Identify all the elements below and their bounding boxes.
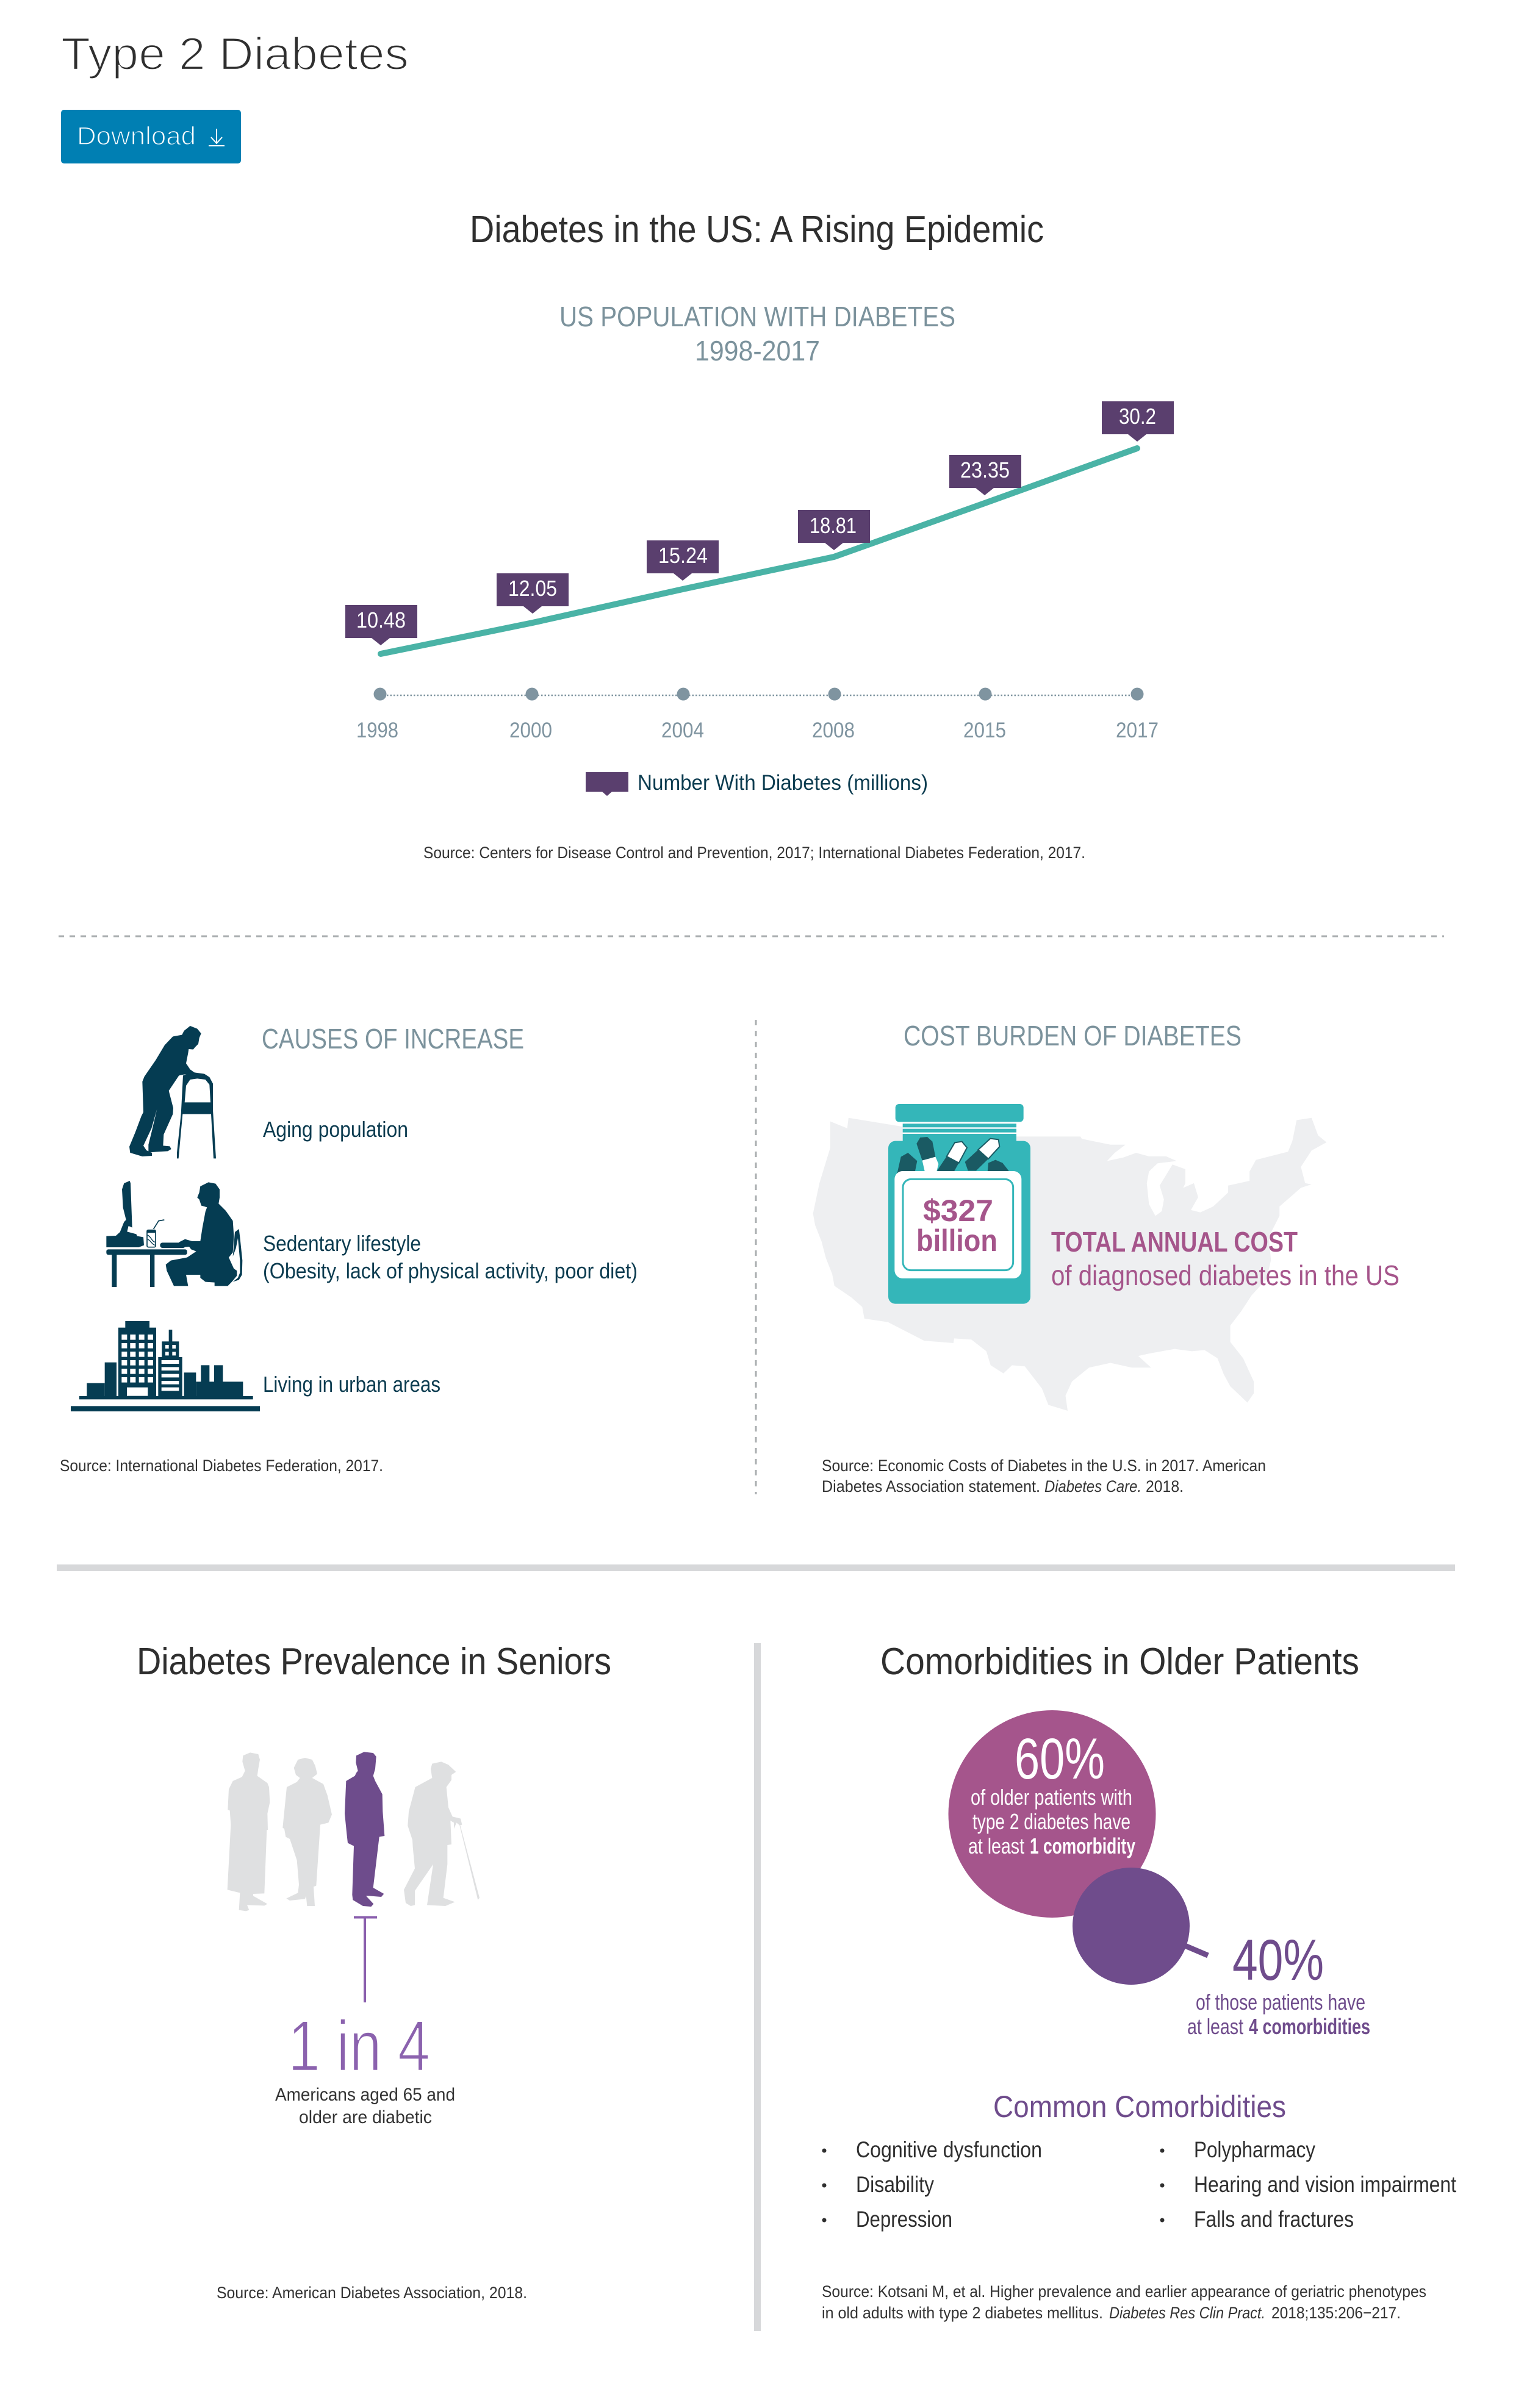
line chart: 23.35 xyxy=(960,457,1010,482)
year labels: 2004 xyxy=(661,718,704,742)
source: cost: Source: Economic Costs of Diabetes in the U.S. in 2017. American xyxy=(822,1457,1266,1475)
list: comorbidities xyxy=(822,2137,1457,2232)
list: comorbidities: Hearing and vision impairment xyxy=(1194,2172,1457,2197)
circle: 60 percent: type 2 diabetes have xyxy=(972,1809,1130,1834)
source: cost: 2018. xyxy=(1146,1477,1184,1496)
stat: 40 percent: at least xyxy=(1187,2014,1243,2039)
chart title xyxy=(559,301,955,367)
jar label text: billion xyxy=(916,1224,997,1258)
source: chart: Source: Centers for Disease Control and Prevention, 2017; International Diabetes Federation, 2017. xyxy=(423,844,1085,862)
circle: 60 percent: 1 comorbidity xyxy=(1030,1833,1135,1858)
heading: common comorbidities: Common Comorbidities xyxy=(993,2090,1286,2124)
circle: 40 percent xyxy=(1073,1868,1208,1985)
list: comorbidities: Cognitive dysfunction xyxy=(856,2137,1042,2162)
panel: comorbidities xyxy=(822,1641,1457,2322)
stat: 40 percent: 4 comorbidities xyxy=(1249,2014,1370,2039)
icon: four senior silhouettes xyxy=(228,1752,480,1911)
text: sedentary: Sedentary lifestyle xyxy=(263,1231,421,1256)
line chart xyxy=(345,401,1174,742)
stat: 40 percent: 40% xyxy=(1232,1928,1324,1993)
connector xyxy=(354,1918,377,2002)
stat: 1 in 4: 1 in 4 xyxy=(288,2006,430,2087)
icon: city buildings xyxy=(71,1321,260,1411)
source: comorbidities: Diabetes Res Clin Pract. xyxy=(1109,2304,1265,2322)
icon: person at desk xyxy=(106,1181,242,1287)
year labels: 2008 xyxy=(812,718,855,742)
map of US xyxy=(813,1118,1326,1411)
chart legend: Number With Diabetes (millions) xyxy=(638,771,928,795)
text: aging: Aging population xyxy=(263,1117,408,1142)
heading: causes: CAUSES OF INCREASE xyxy=(262,1023,524,1055)
stat caption xyxy=(275,2085,455,2127)
year labels: 2000 xyxy=(509,718,552,742)
title: Type 2 Diabetes xyxy=(61,28,409,79)
heading: comorbidities: Comorbidities in Older Patients xyxy=(880,1641,1359,1683)
panel: cost burden xyxy=(813,1020,1400,1496)
callout: total annual cost: TOTAL ANNUAL COST xyxy=(1051,1226,1298,1258)
circle: 60 percent xyxy=(948,1710,1155,1918)
source: cost xyxy=(822,1457,1266,1496)
heading: cost burden: COST BURDEN OF DIABETES xyxy=(904,1020,1242,1052)
heading: seniors: Diabetes Prevalence in Seniors xyxy=(137,1641,611,1683)
list: comorbidities: Depression xyxy=(856,2207,952,2232)
text: sedentary: (Obesity, lack of physical activity, poor diet) xyxy=(263,1258,638,1283)
download button: Download xyxy=(77,121,196,150)
text: urban: Living in urban areas xyxy=(263,1372,440,1397)
trend line xyxy=(381,448,1137,654)
line chart: 12.05 xyxy=(508,576,557,601)
source: seniors: Source: American Diabetes Association, 2018. xyxy=(217,2284,527,2302)
circle: 60 percent: of older patients with xyxy=(971,1785,1132,1810)
axis dots xyxy=(373,688,1143,700)
panel: causes of increase xyxy=(60,1023,638,1475)
source: comorbidities: in old adults with type 2 diabetes mellitus. xyxy=(822,2304,1103,2322)
source: comorbidities xyxy=(822,2282,1426,2322)
list: comorbidities: Falls and fractures xyxy=(1194,2207,1354,2232)
icon: pill jar xyxy=(888,1104,1030,1304)
download button xyxy=(61,110,241,163)
callout: total annual cost: of diagnosed diabetes in the US xyxy=(1051,1260,1400,1291)
text: sedentary xyxy=(263,1231,638,1283)
year labels: 2017 xyxy=(1116,718,1159,742)
line chart: 15.24 xyxy=(658,543,708,568)
chart title: US POPULATION WITH DIABETES xyxy=(559,301,955,332)
jar label text: $327 xyxy=(923,1194,993,1228)
data labels xyxy=(345,401,1174,645)
line chart: 10.48 xyxy=(356,607,406,632)
stat: 40 percent xyxy=(1187,1928,1370,2039)
source: comorbidities: Source: Kotsani M, et al. Higher prevalence and earlier appearance of geriatric phenotypes xyxy=(822,2282,1426,2301)
icon: person with walker xyxy=(129,1026,216,1158)
jar label text xyxy=(916,1194,997,1258)
line chart: 18.81 xyxy=(810,513,857,538)
callout: total annual cost xyxy=(1051,1226,1400,1291)
source: cost: Diabetes Association statement. xyxy=(822,1477,1040,1496)
circle: 60 percent: 60% xyxy=(1015,1727,1105,1791)
stat: 40 percent: of those patients have xyxy=(1196,1990,1365,2015)
list: comorbidities: Disability xyxy=(856,2172,934,2197)
year labels: 1998 xyxy=(356,718,398,742)
source: cost: Diabetes Care. xyxy=(1044,1477,1141,1496)
year labels xyxy=(356,718,1159,742)
chart title: 1998-2017 xyxy=(695,335,820,367)
source: comorbidities: 2018;135:206−217. xyxy=(1271,2304,1401,2322)
circle: 60 percent: at least xyxy=(968,1833,1024,1858)
line chart: 30.2 xyxy=(1119,404,1156,429)
heading: rising epidemic: Diabetes in the US: A Rising Epidemic xyxy=(470,209,1044,251)
stat caption: Americans aged 65 and xyxy=(275,2085,455,2105)
stat caption: older are diabetic xyxy=(299,2107,432,2127)
year labels: 2015 xyxy=(963,718,1006,742)
list: comorbidities: Polypharmacy xyxy=(1194,2137,1315,2162)
panel: seniors xyxy=(137,1641,611,2302)
source: causes: Source: International Diabetes Federation, 2017. xyxy=(60,1457,383,1475)
